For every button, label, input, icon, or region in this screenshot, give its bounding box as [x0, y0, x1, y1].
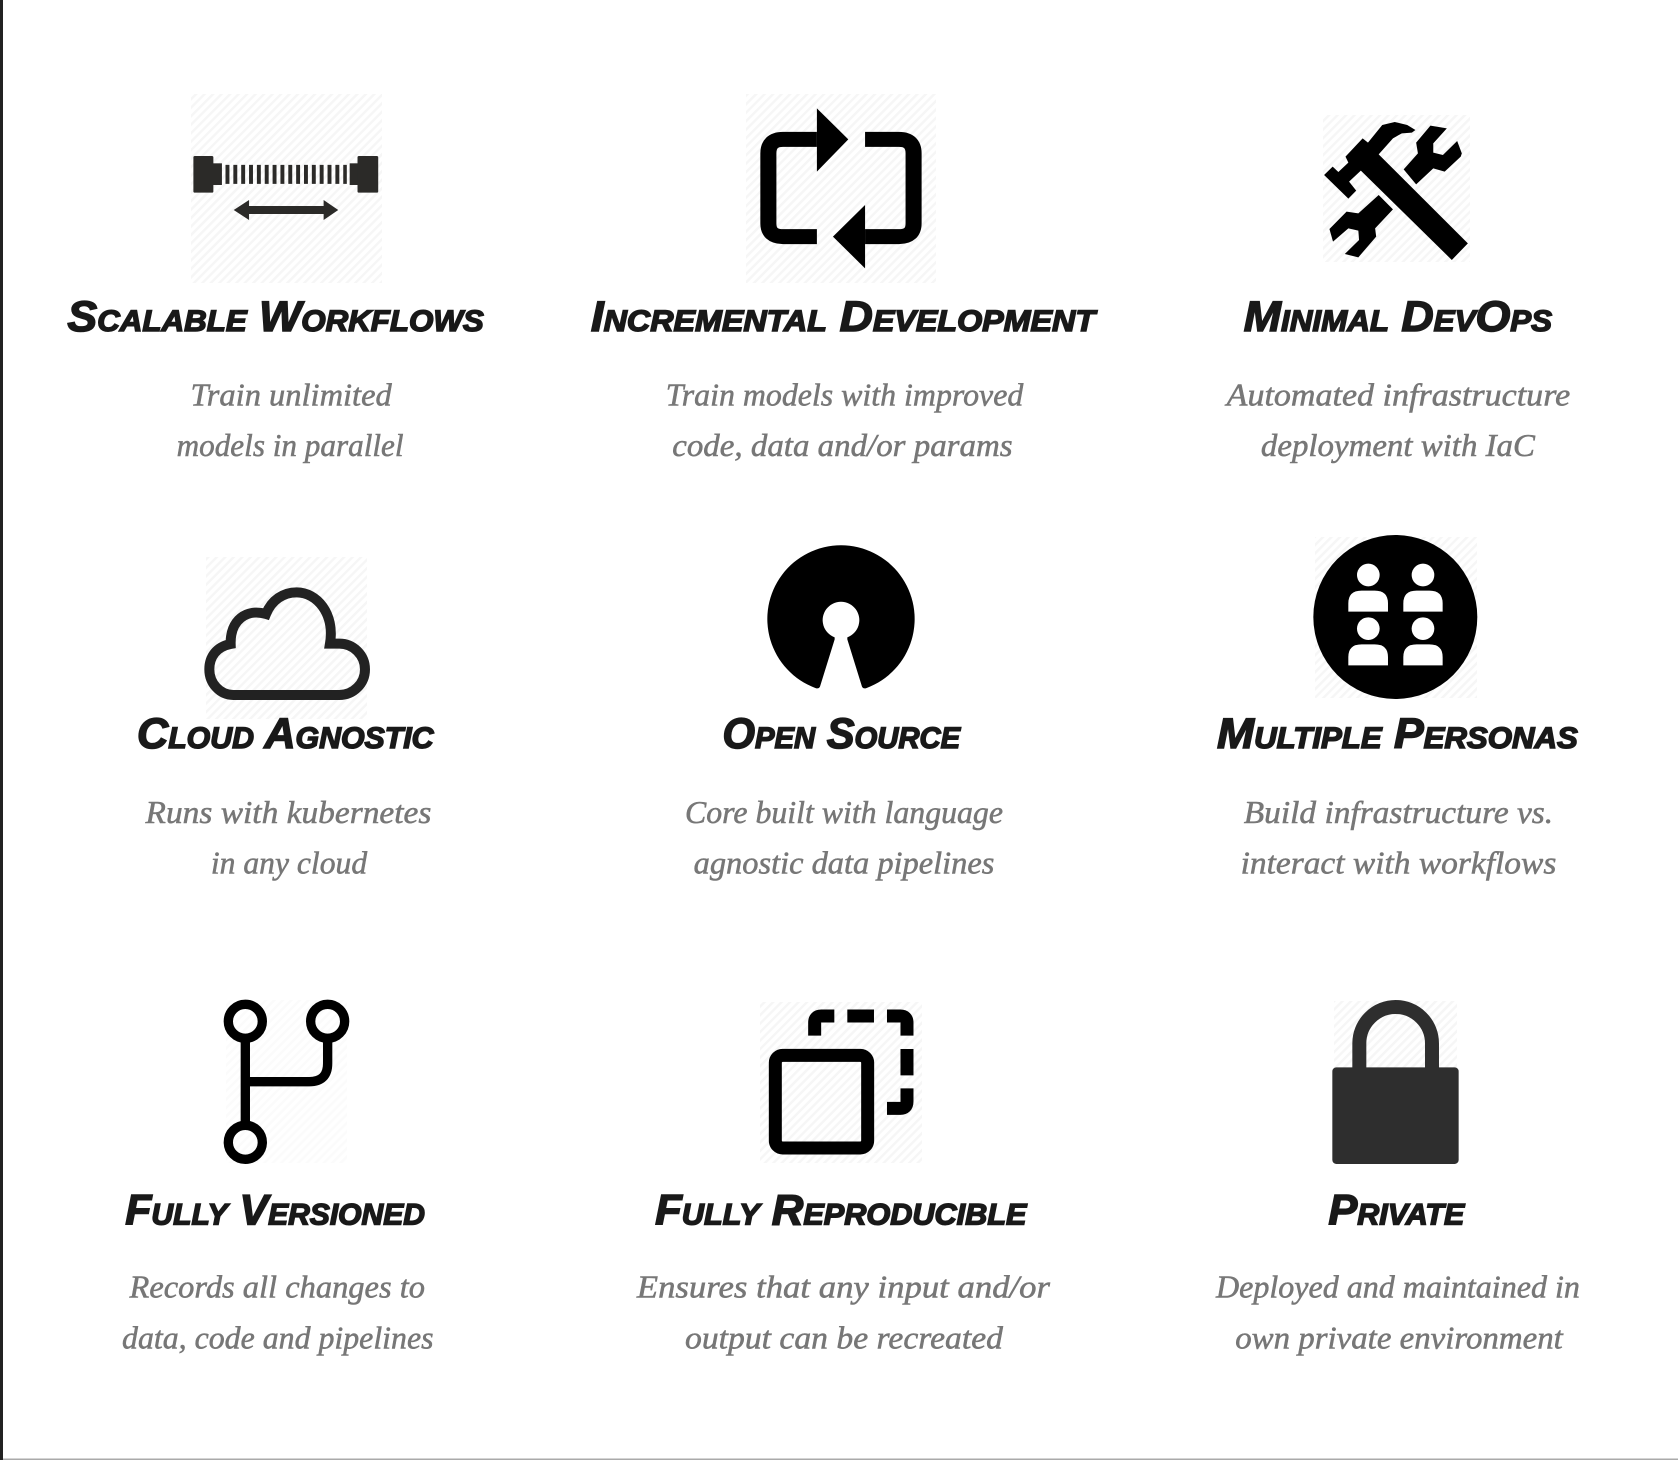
panel: Minimal DevOps — [1225, 115, 1570, 463]
panel: Incremental Development — [591, 94, 1098, 463]
description: Cloud Agnostic: Runs with kubernetes — [145, 794, 431, 830]
description: Fully Reproducible — [636, 1268, 1051, 1356]
description: Open Source: Core built with language — [685, 794, 1003, 830]
description: Fully Versioned: data, code and pipelines — [122, 1320, 434, 1356]
description: Private: Deployed and maintained in — [1215, 1268, 1580, 1304]
description: Incremental Development: Train models with improved — [666, 377, 1024, 413]
description: Cloud Agnostic: in any cloud — [211, 844, 368, 880]
icon: hammer and wrench — [1323, 115, 1470, 262]
icon: four people in a circle — [1313, 535, 1477, 699]
heading: Fully Reproducible: Fully Reproducible — [655, 1187, 1028, 1235]
description: Fully Versioned: Records all changes to — [129, 1268, 425, 1304]
description: Open Source — [685, 794, 1003, 880]
description: Fully Reproducible: output can be recreated — [685, 1320, 1004, 1356]
panel: Private — [1215, 1001, 1580, 1356]
panel: Open Source — [685, 545, 1003, 880]
heading: Cloud Agnostic: Cloud Agnostic — [137, 710, 435, 758]
heading: Multiple Personas: Multiple Personas — [1217, 710, 1578, 758]
panel: Scalable Workflows — [67, 94, 484, 463]
description: Cloud Agnostic — [145, 794, 431, 880]
description: Minimal DevOps — [1225, 377, 1570, 463]
description: Minimal DevOps: Automated infrastructure — [1225, 377, 1570, 413]
description: Incremental Development — [666, 377, 1024, 463]
description: Open Source: agnostic data pipelines — [694, 844, 994, 880]
icon: spring with double arrow — [191, 94, 382, 283]
panel: Cloud Agnostic — [137, 557, 435, 880]
heading: Minimal DevOps: Minimal DevOps — [1244, 293, 1552, 341]
description: Scalable Workflows: Train unlimited — [191, 377, 393, 413]
description: Private — [1215, 1268, 1580, 1356]
description: Fully Versioned — [122, 1268, 434, 1356]
description: Fully Reproducible: Ensures that any input and/or — [636, 1268, 1051, 1304]
description: Private: own private environment — [1235, 1320, 1564, 1356]
heading: Private: Private — [1328, 1187, 1465, 1235]
description: Minimal DevOps: deployment with IaC — [1261, 427, 1536, 463]
icon: repeat arrows — [746, 94, 936, 283]
description: Multiple Personas: Build infrastructure vs. — [1244, 794, 1553, 830]
icon: padlock — [1332, 1001, 1459, 1164]
heading: Incremental Development: Incremental Development — [591, 293, 1098, 341]
description: Scalable Workflows: models in parallel — [177, 427, 404, 463]
panel: Fully Versioned — [122, 1000, 434, 1356]
icon: cloud — [206, 557, 367, 719]
icon: open source keyhole — [767, 545, 915, 688]
heading: Scalable Workflows: Scalable Workflows — [67, 293, 484, 341]
description: Incremental Development: code, data and/or params — [672, 427, 1013, 463]
icon: copied squares — [760, 1002, 922, 1163]
heading: Open Source: Open Source — [723, 710, 961, 758]
description: Scalable Workflows — [177, 377, 404, 463]
icon: version branch — [226, 1000, 347, 1163]
description: Multiple Personas: interact with workflows — [1241, 844, 1556, 880]
panel: Multiple Personas — [1217, 535, 1578, 880]
panel: Fully Reproducible — [636, 1002, 1051, 1356]
description: Multiple Personas — [1241, 794, 1556, 880]
heading: Fully Versioned: Fully Versioned — [125, 1187, 425, 1235]
